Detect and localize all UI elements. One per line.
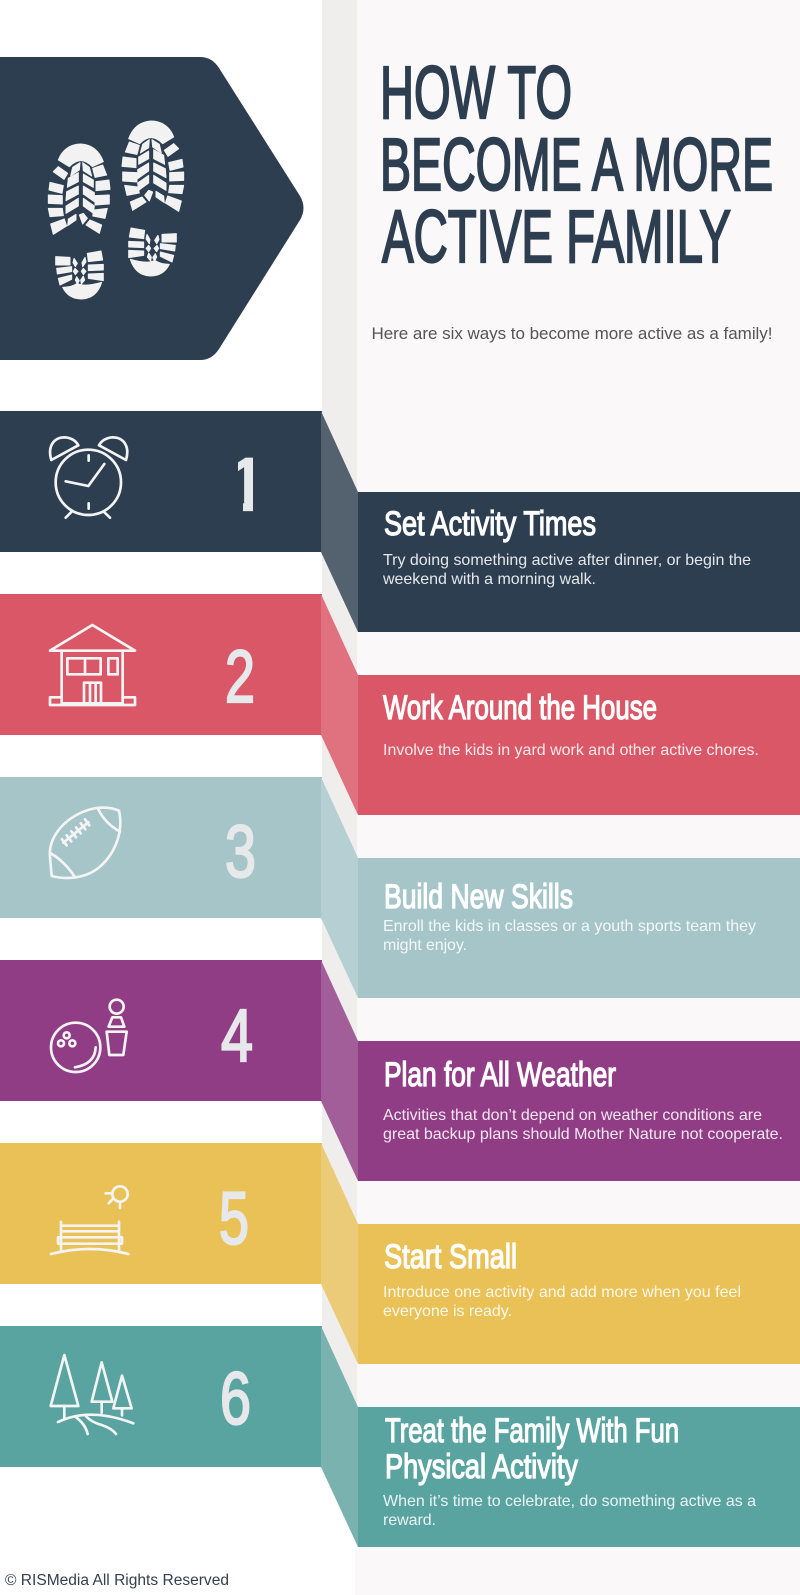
step 6 [0, 1326, 800, 1547]
body text: When it’s time to celebrate, do something active as a [383, 1493, 756, 1510]
icon: boot prints [48, 121, 184, 299]
body text [383, 1107, 783, 1143]
number 3: 3 [225, 810, 256, 893]
number 6: 6 [220, 1357, 251, 1440]
title: HOW TO [380, 51, 572, 134]
icon: trees and hills [51, 1355, 133, 1434]
step 5 [0, 1143, 800, 1364]
step 4 [0, 960, 800, 1181]
number 2: 2 [225, 635, 255, 718]
body text: everyone is ready. [383, 1303, 512, 1320]
body text [383, 918, 756, 954]
body text: reward. [383, 1512, 436, 1529]
heading: Plan for All Weather [384, 1056, 616, 1094]
icon: alarm clock [50, 437, 127, 518]
icon: bowling ball and pin [51, 1000, 127, 1072]
icon: house [50, 625, 135, 705]
body text: weekend with a morning walk. [382, 571, 596, 588]
number 1: 1 [225, 443, 270, 526]
body text: Involve the kids in yard work and other active chores. [383, 742, 759, 759]
header arrow panel [0, 57, 304, 360]
icon: football [50, 808, 120, 878]
heading: Physical Activity [385, 1448, 578, 1486]
body text [382, 552, 751, 588]
body text: might enjoy. [383, 937, 467, 954]
heading: Treat the Family With Fun [385, 1412, 679, 1450]
heading: Set Activity Times [384, 505, 596, 543]
intro text: Here are six ways to become more active as a family! [372, 324, 772, 343]
icon: park bench and sun [51, 1186, 128, 1254]
body text [383, 1284, 741, 1320]
body text: Enroll the kids in classes or a youth sports team they [383, 918, 756, 935]
copyright: © RISMedia All Rights Reserved [5, 1572, 229, 1589]
body text [383, 1493, 756, 1529]
heading: Work Around the House [383, 689, 657, 727]
heading: Start Small [384, 1238, 517, 1276]
heading: Build New Skills [384, 878, 573, 916]
step 2 [0, 594, 800, 815]
step 1 [0, 411, 800, 632]
heading [385, 1412, 679, 1486]
body text: Activities that don’t depend on weather conditions are [383, 1107, 762, 1124]
number 4: 4 [221, 994, 253, 1077]
title [380, 51, 773, 278]
body text: Introduce one activity and add more when you feel [383, 1284, 741, 1301]
step 3 [0, 777, 800, 998]
body text: great backup plans should Mother Nature not cooperate. [383, 1126, 783, 1143]
number 5: 5 [219, 1177, 249, 1260]
body text: Try doing something active after dinner, or begin the [383, 552, 751, 569]
